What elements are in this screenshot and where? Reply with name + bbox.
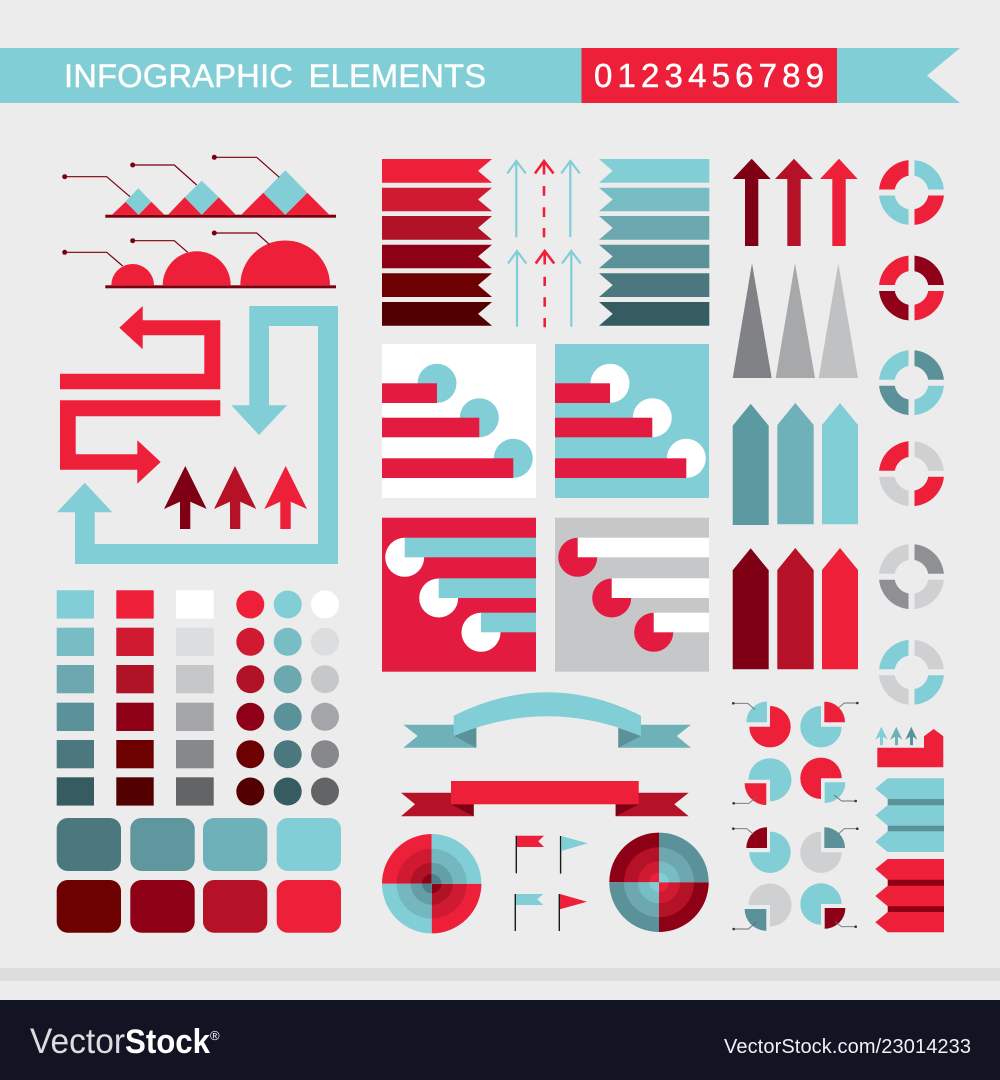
footer logo: Stock <box>125 1023 210 1061</box>
footer shadow stripe <box>0 968 1000 981</box>
footer bar <box>0 1000 1000 1080</box>
ribbons: teal stack <box>599 159 709 326</box>
icon: teal pennant <box>560 836 588 874</box>
chart: ring teal shades <box>879 350 944 415</box>
chart: ring red and grey <box>879 441 944 506</box>
footer image id: VectorStock.com/23014233 <box>724 1036 971 1058</box>
colour swatches: circles <box>236 590 339 806</box>
panel: white tile with stepped bars <box>382 344 536 498</box>
ribbon: straight red banner <box>401 781 689 816</box>
panel: teal tile with stepped bars <box>555 344 709 498</box>
footer logo: ® <box>210 1028 220 1043</box>
chart: mountain peaks <box>62 155 336 218</box>
chart: ring red and teal <box>879 160 944 225</box>
arrows: dashed red up arrows <box>535 161 554 327</box>
chart: ring teal and grey <box>879 640 944 705</box>
colour swatches: rounded red <box>57 880 341 933</box>
icon: red block with small arrows <box>875 727 943 767</box>
ribbon: red chevron stack <box>875 859 944 932</box>
ribbons: red stack <box>382 159 492 326</box>
colour swatches: squares <box>57 590 214 806</box>
arrows: teal pentagon bars <box>733 403 858 525</box>
arrows: three small up arrows <box>164 466 307 529</box>
colour swatches: rounded teal <box>57 818 341 871</box>
footer logo: Vector <box>30 1022 125 1061</box>
arrows: three large up arrows <box>733 159 858 246</box>
title banner <box>0 48 960 103</box>
arrow: red turning left <box>60 306 220 389</box>
icon: teal notched flag <box>515 894 543 931</box>
title: INFOGRAPHIC ELEMENTS <box>64 58 486 94</box>
icon: red notched flag <box>516 836 544 873</box>
arrow: teal loop <box>57 306 338 564</box>
panel: red tile with stepped bars <box>382 518 536 672</box>
chart: target dial, dark centre <box>382 834 481 933</box>
chart: pie charts with callouts <box>732 702 859 931</box>
footer logo <box>30 1022 220 1061</box>
chart: grey triangles <box>733 263 858 378</box>
panel: grey tile with stepped bars <box>555 518 709 672</box>
chart: ring grey shades <box>879 544 944 609</box>
chart: ring red and maroon <box>879 256 944 320</box>
ribbon: curved teal banner <box>403 692 691 748</box>
chart: target dial, light centre <box>609 833 709 932</box>
ribbon: teal chevron stack <box>875 778 944 852</box>
number row: 0123456789 <box>594 57 824 94</box>
arrows: red pentagon bars <box>733 548 858 669</box>
arrow: red turning right <box>60 400 220 484</box>
icon: red pennant <box>559 894 587 931</box>
chart: domes <box>62 230 336 288</box>
arrows: thin teal up arrows <box>507 160 581 327</box>
